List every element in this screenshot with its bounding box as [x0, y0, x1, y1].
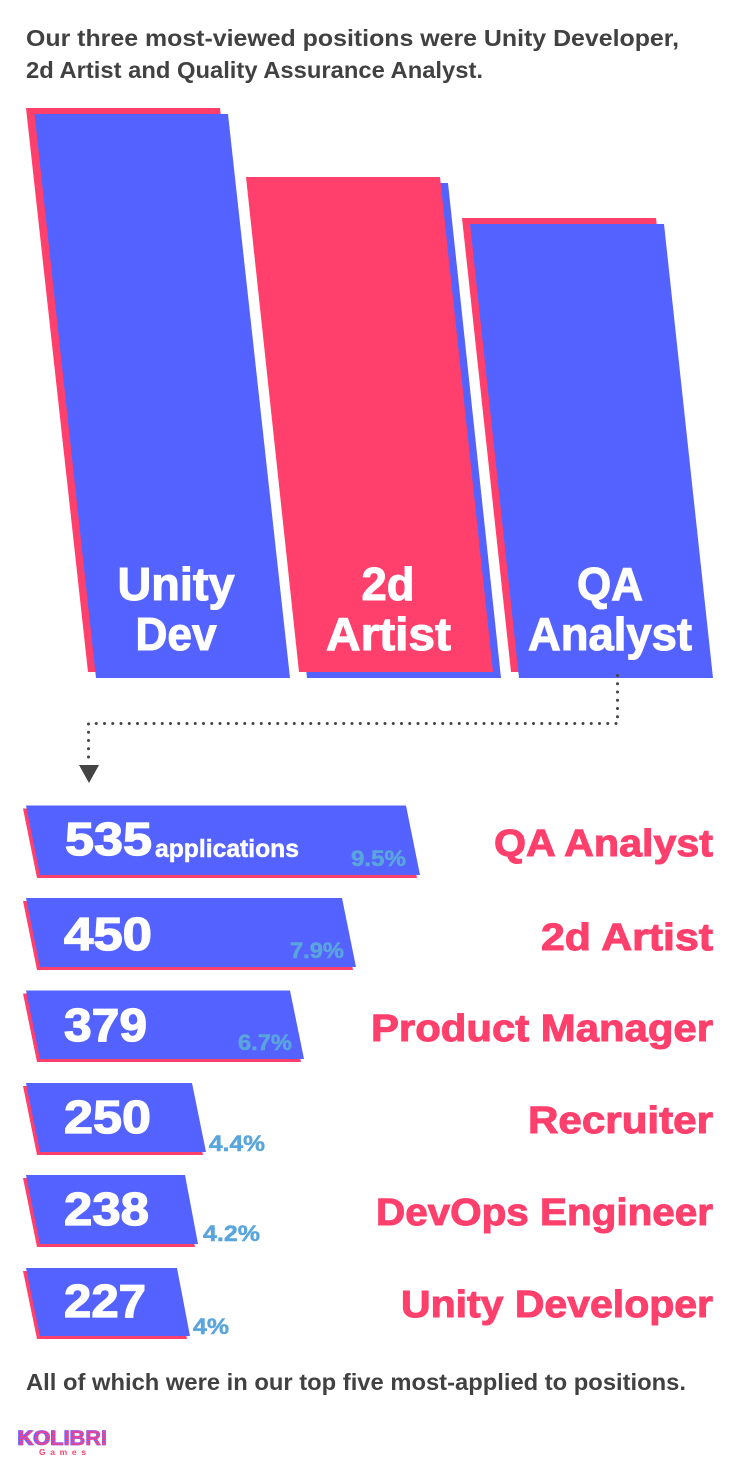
bar: QA Analyst: QA Analyst	[494, 823, 713, 865]
bar: DevOps Engineer: DevOps Engineer	[376, 1192, 713, 1234]
bar: Unity Developer: 227	[64, 1275, 146, 1327]
column: QA Analyst	[462, 218, 713, 678]
column: QA Analyst: QA	[577, 558, 643, 610]
bar: Recruiter: 4.4%	[209, 1131, 265, 1156]
bar: DevOps Engineer	[23, 1175, 713, 1247]
bar: Recruiter: Recruiter	[528, 1100, 713, 1142]
bar: 2d Artist: 7.9%	[290, 938, 344, 963]
logo: Kolibri Games: KOLIBRI	[17, 1427, 107, 1450]
bar: DevOps Engineer: 238	[64, 1183, 149, 1235]
bar: QA Analyst: applications	[155, 835, 299, 863]
title	[26, 25, 679, 83]
bar: QA Analyst: 535	[65, 813, 152, 865]
arrow: dotted connector	[79, 676, 618, 783]
column: Unity Dev: Dev	[136, 608, 217, 660]
bar: Product Manager	[23, 990, 713, 1062]
bar: Product Manager: Product Manager	[371, 1008, 713, 1050]
title: Our three most-viewed positions were Unity Developer,	[26, 25, 679, 51]
bar: Recruiter	[23, 1083, 713, 1156]
column: 2d Artist: 2d	[362, 558, 414, 610]
column: Unity Dev: Unity	[118, 558, 235, 610]
column: QA Analyst: Analyst	[528, 608, 692, 660]
bar: QA Analyst: 9.5%	[351, 846, 406, 871]
bar: 2d Artist	[23, 898, 713, 970]
logo: Kolibri Games: KOLIBRI	[18, 1427, 107, 1450]
bar: Unity Developer: Unity Developer	[401, 1284, 713, 1326]
bar: Product Manager: 379	[64, 999, 147, 1051]
logo: Kolibri Games: Games	[39, 1447, 86, 1457]
column: 2d Artist	[246, 177, 501, 678]
bar: QA Analyst	[23, 806, 713, 878]
bar: Product Manager: 6.7%	[238, 1030, 292, 1055]
bar: 2d Artist: 2d Artist	[541, 917, 713, 959]
title: 2d Artist and Quality Assurance Analyst.	[26, 57, 483, 83]
bar: 2d Artist: 450	[64, 908, 152, 960]
column: Unity Dev	[26, 108, 290, 678]
bar: DevOps Engineer: 4.2%	[203, 1221, 260, 1246]
column: 2d Artist: Artist	[326, 608, 451, 660]
bar: Recruiter: 250	[64, 1091, 151, 1143]
bar: Unity Developer: 4%	[193, 1314, 229, 1339]
closing text: All of which were in our top five most-applied to positions.	[26, 1369, 686, 1395]
bar: Unity Developer	[23, 1268, 713, 1339]
